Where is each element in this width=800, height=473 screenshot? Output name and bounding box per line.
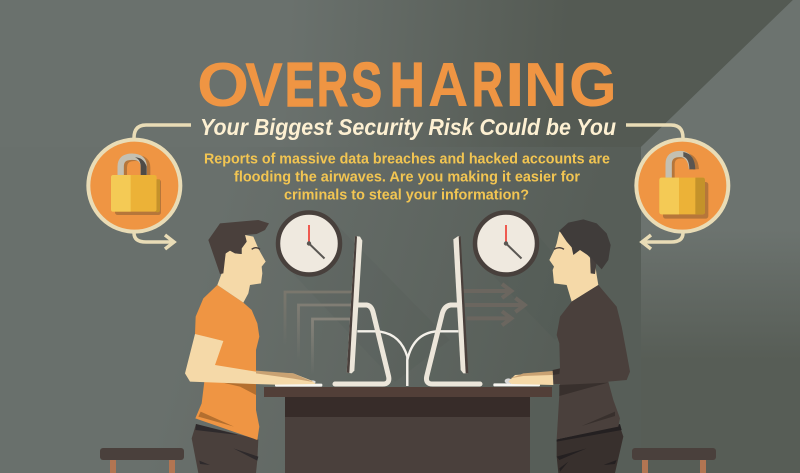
right computer [407,236,480,386]
title: O [197,51,249,120]
left connector arrows [134,125,191,249]
title: R [472,51,503,120]
subtitle: Your Biggest Security Risk Could be You [200,114,616,140]
title: R [317,51,348,120]
pants [557,427,623,473]
title: V [245,51,283,120]
hand [508,373,553,385]
title: E [285,51,314,120]
hair [590,257,597,274]
clock right [475,212,537,274]
shirt [195,285,259,440]
mouse and keyboard [275,384,322,387]
desk [264,387,552,473]
icon: open padlock [636,140,728,232]
mouse and keyboard [493,383,540,386]
intro text: Reports of massive data breaches and hacked accounts are [204,150,610,168]
left man [185,220,322,473]
head and neck [549,232,598,302]
icon: closed padlock [88,140,180,232]
intro text [204,150,610,204]
left computer [335,236,407,386]
title: I [505,51,525,120]
right man [493,219,630,473]
sweater [553,285,630,439]
title: G [569,51,617,120]
left stool [100,448,184,473]
title: A [428,51,468,120]
arm [185,334,316,385]
clock shadows [285,218,590,382]
right connector arrows [626,125,683,249]
head and neck [217,235,266,303]
title: S [351,51,382,120]
intro text: criminals to steal your information? [284,186,529,204]
intro text: flooding the airwaves. Are you making it easier for [234,168,580,186]
title [197,51,617,120]
hair [208,220,269,274]
title: H [390,51,424,120]
motion lines from left monitor [285,292,352,374]
clock left [278,212,340,274]
right stool [632,448,716,473]
title: N [524,51,567,120]
beanie [559,219,611,269]
motion arrows from right monitor [463,284,525,325]
pants [192,424,258,473]
